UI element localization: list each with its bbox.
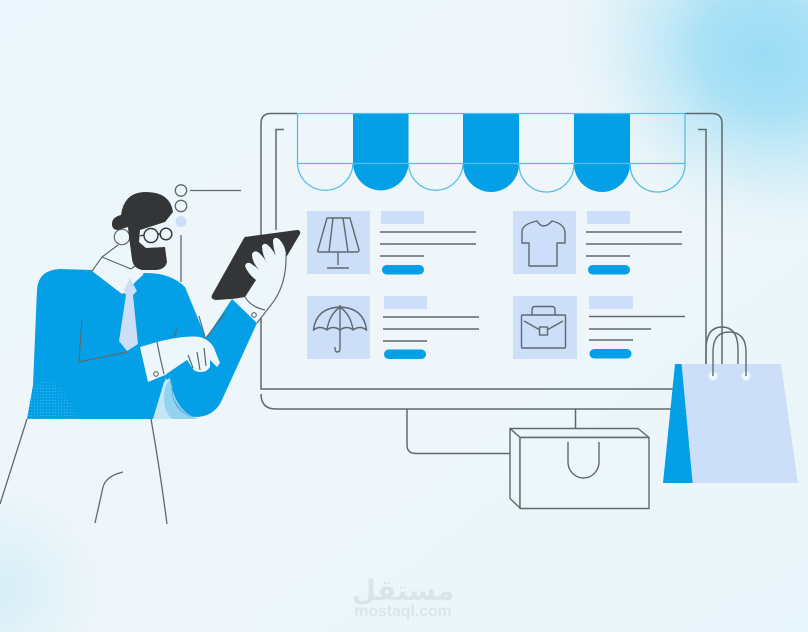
- shopping bag: [663, 327, 798, 483]
- awning: [298, 114, 685, 192]
- tie: [119, 278, 138, 351]
- monitor stand: [407, 409, 576, 454]
- hair and beard: [112, 192, 173, 270]
- body stipple: [27, 380, 78, 419]
- arm shadow: [153, 378, 200, 419]
- tablet: [212, 230, 300, 300]
- icon: umbrella: [314, 305, 366, 352]
- icon: lamp: [318, 218, 359, 268]
- torso and arm: [27, 269, 257, 419]
- glasses: [140, 228, 172, 242]
- icon: t-shirt: [522, 221, 565, 266]
- icon: briefcase: [522, 306, 566, 348]
- product card: umbrella: [307, 296, 479, 359]
- watermark: mostaql.com: [354, 603, 452, 620]
- shopping box: [510, 428, 649, 508]
- head: [112, 192, 173, 270]
- person: [0, 192, 300, 524]
- upper hand and cuff: [233, 238, 286, 323]
- thought bubbles: [175, 185, 241, 282]
- product card: lamp: [307, 211, 476, 274]
- watermark: مستقل: [352, 574, 454, 607]
- collar: [92, 257, 144, 294]
- legs: [0, 419, 167, 524]
- suit lines: [79, 313, 225, 362]
- product card: shirt: [513, 211, 682, 274]
- ear: [114, 229, 130, 245]
- lower hand and cuff: [140, 337, 220, 382]
- product card: briefcase: [513, 296, 685, 359]
- monitor: [261, 114, 722, 454]
